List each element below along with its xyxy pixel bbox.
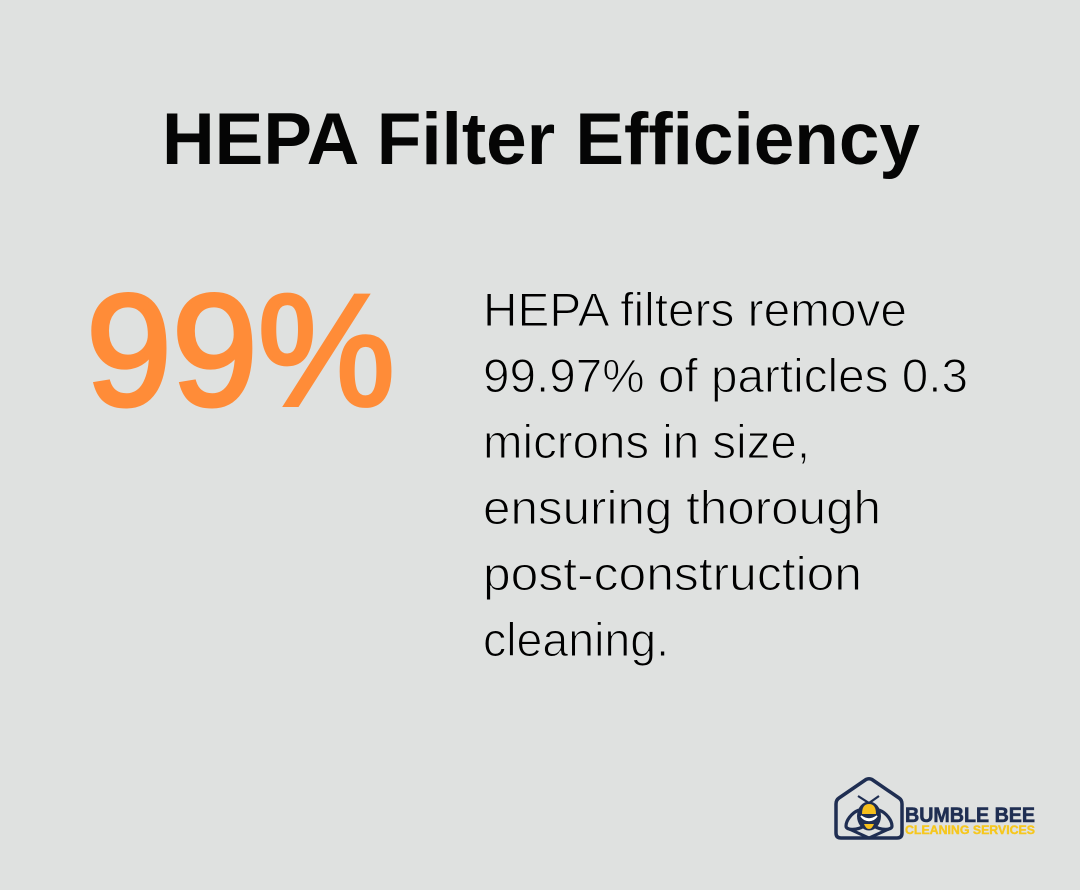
description text: ensuring thorough	[483, 481, 881, 534]
description text: 99.97% of particles 0.3	[483, 349, 968, 402]
description text: post-construction	[483, 547, 862, 600]
title: HEPA Filter Efficiency	[162, 99, 920, 180]
description text: HEPA filters remove	[483, 283, 907, 336]
description text	[483, 283, 968, 666]
description text: cleaning.	[483, 613, 669, 666]
icon: house outline with bee	[836, 779, 902, 838]
logo name: BUMBLE BEE	[905, 804, 1035, 827]
big statistic: 99%	[86, 261, 395, 439]
description text: microns in size,	[483, 415, 810, 468]
logo tagline: CLEANING SERVICES	[905, 823, 1035, 837]
logo: Bumble Bee Cleaning Services	[836, 779, 1035, 838]
